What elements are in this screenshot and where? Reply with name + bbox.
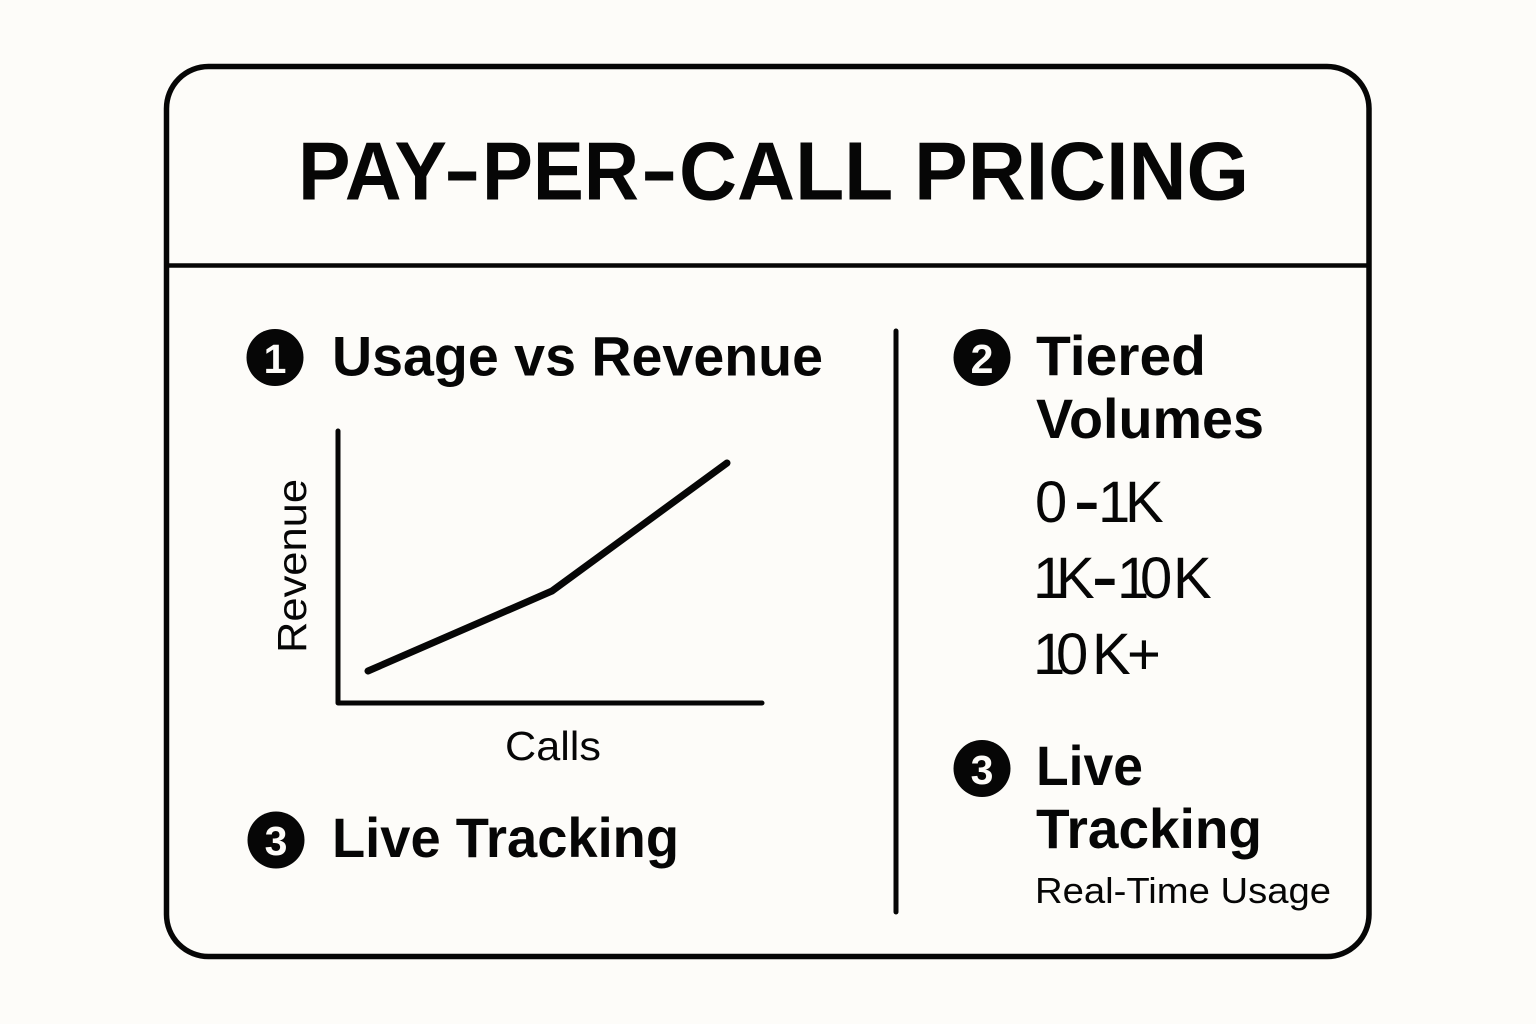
tier list: 1 — [1098, 470, 1130, 535]
tier list: 1 — [1033, 622, 1065, 687]
title: PAY — [298, 124, 447, 218]
main card frame — [166, 66, 1369, 956]
title: - — [640, 104, 678, 232]
icon: number 3 — [954, 740, 1010, 797]
title: PER — [482, 124, 639, 218]
title: CALL PRICING — [679, 124, 1249, 218]
panel: tiered volumes — [954, 324, 1264, 687]
heading: live tracking: Live Tracking — [332, 806, 679, 869]
title: - — [443, 104, 481, 232]
tier list: - — [1092, 531, 1118, 620]
heading: live tracking: Tracking — [1036, 797, 1262, 860]
icon: number 2: 2 — [971, 336, 993, 382]
tier list: K — [1092, 622, 1131, 687]
icon: number 3: 3 — [971, 747, 993, 793]
tier list: K — [1125, 470, 1164, 535]
tier list: + — [1127, 622, 1161, 687]
heading: tiered volumes: Volumes — [1036, 387, 1264, 450]
tier list: 0 — [1140, 546, 1172, 611]
heading: tiered volumes: Tiered — [1036, 324, 1206, 387]
icon: number 1 — [246, 329, 304, 386]
tier list: K — [1056, 546, 1095, 611]
tier list: 1 — [1033, 546, 1065, 611]
y axis label: Revenue — [269, 479, 315, 653]
icon: number 3 — [248, 812, 304, 868]
x axis label: Calls — [505, 723, 601, 769]
heading: live tracking: Live — [1036, 734, 1143, 797]
tier list: 0 — [1056, 622, 1088, 687]
icon: number 2 — [954, 329, 1010, 386]
panel: live tracking left — [248, 806, 679, 869]
tier list — [1033, 455, 1212, 687]
tier list: - — [1074, 455, 1100, 544]
heading: usage vs revenue: Usage vs Revenue — [332, 324, 823, 388]
panel: usage vs revenue — [246, 324, 823, 769]
line chart — [269, 431, 762, 769]
tier list: 1 — [1117, 546, 1149, 611]
heading: tiered volumes — [1036, 324, 1264, 450]
icon: number 3: 3 — [265, 818, 287, 864]
icon: number 1: 1 — [264, 336, 286, 382]
tier list: K — [1173, 546, 1212, 611]
tier list: 0 — [1035, 470, 1067, 535]
caption: real-time usage: Real-Time Usage — [1035, 870, 1331, 911]
heading: live tracking — [1036, 734, 1262, 860]
panel: live tracking right — [954, 734, 1331, 911]
